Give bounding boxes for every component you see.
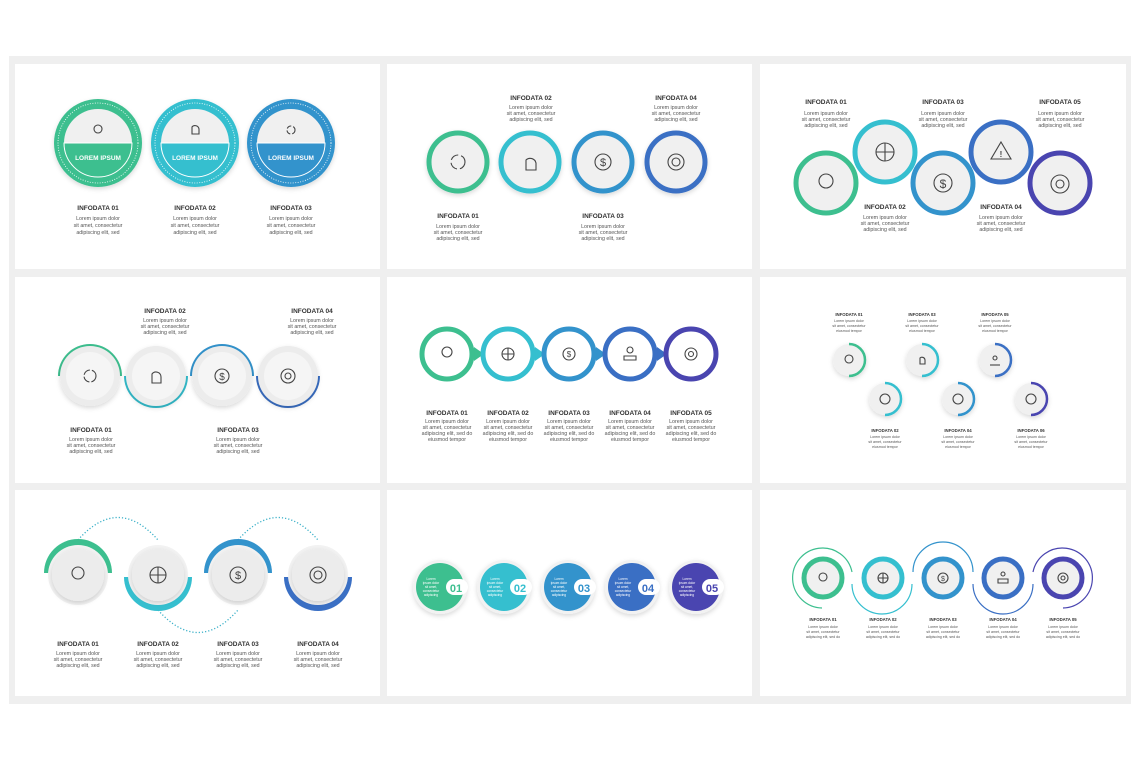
labels: sit amet, consectetur	[866, 630, 900, 634]
icons	[442, 347, 697, 360]
labels: INFODATA 01	[57, 641, 99, 648]
small white texts: sit amet,	[617, 585, 629, 589]
labels: Lorem ipsum dolor	[928, 625, 959, 629]
labels: sit amet, consectetur	[294, 657, 343, 663]
labels: Lorem ipsum dolor	[296, 651, 340, 657]
labels: eiusmod tempor	[982, 329, 1009, 333]
labels: INFODATA 02	[869, 617, 897, 622]
labels: eiusmod tempor	[611, 437, 649, 443]
labels: eiusmod tempor	[428, 437, 466, 443]
labels: sit amet, consectetur	[1036, 117, 1085, 123]
labels: sit amet, consectetur	[288, 324, 337, 330]
labels: INFODATA 01	[77, 205, 119, 212]
labels: adipiscing elit, sed	[436, 236, 480, 242]
icons: $	[940, 177, 947, 191]
labels: INFODATA 02	[174, 205, 216, 212]
labels: INFODATA 03	[908, 312, 936, 317]
labels: adipiscing elit, sed	[296, 663, 340, 669]
labels: INFODATA 04	[291, 308, 333, 315]
icons	[72, 567, 326, 583]
labels: Lorem ipsum dolor	[669, 419, 713, 425]
labels: INFODATA 03	[582, 213, 624, 220]
labels	[806, 617, 1080, 639]
labels: Lorem ipsum dolor	[269, 216, 313, 222]
small white texts: ipsum dolor	[615, 581, 632, 585]
labels: adipiscing elit, sed	[290, 330, 334, 336]
labels: INFODATA 05	[1039, 99, 1081, 106]
labels: eiusmod tempor	[836, 329, 863, 333]
labels	[832, 312, 1048, 449]
labels: sit amet, consectetur	[667, 425, 716, 431]
panel 2: four ring circles	[387, 64, 752, 269]
labels: Lorem ipsum dolor	[56, 651, 100, 657]
labels: sit amet, consectetur	[267, 223, 316, 229]
small white texts: consectetur	[423, 589, 440, 593]
labels: adipiscing elit, sed do	[986, 635, 1020, 639]
labels: adipiscing elit, sed	[216, 663, 260, 669]
labels: Lorem ipsum dolor	[290, 318, 334, 324]
labels: sit amet, consectetur	[941, 440, 975, 444]
labels: sit amet, consectetur	[986, 630, 1020, 634]
labels: adipiscing elit, sed	[804, 123, 848, 129]
small white texts: ipsum dolor	[679, 581, 696, 585]
small white texts	[423, 577, 696, 597]
labels: INFODATA 02	[871, 428, 899, 433]
labels: INFODATA 04	[609, 410, 651, 417]
labels: INFODATA 03	[929, 617, 957, 622]
dotted connectors	[78, 518, 318, 632]
labels: sit amet, consectetur	[214, 657, 263, 663]
labels: sit amet, consectetur	[652, 111, 701, 117]
labels: Lorem ipsum dolor	[834, 319, 865, 323]
icons: $	[600, 157, 606, 169]
labels: INFODATA 01	[426, 410, 468, 417]
labels: Lorem ipsum dolor	[870, 435, 901, 439]
labels: sit amet, consectetur	[802, 117, 851, 123]
labels: eiusmod tempor	[872, 445, 899, 449]
labels	[74, 205, 316, 236]
panel 5: arrow chain five circles	[387, 277, 752, 483]
icons	[819, 142, 1069, 193]
labels: Lorem ipsum dolor	[804, 111, 848, 117]
labels: Lorem ipsum dolor	[863, 215, 907, 221]
small white texts: sit amet,	[681, 585, 693, 589]
panel 9: circles with circular arrows	[760, 490, 1126, 696]
small white texts: Lorem	[682, 577, 692, 581]
labels: sit amet, consectetur	[171, 223, 220, 229]
labels: adipiscing elit, sed	[173, 230, 217, 236]
labels: adipiscing elit, sed do	[605, 431, 655, 437]
labels	[802, 99, 1085, 233]
labels: adipiscing elit, sed	[509, 117, 553, 123]
labels: sit amet, consectetur	[1014, 440, 1048, 444]
labels: sit amet, consectetur	[806, 630, 840, 634]
arrows	[793, 542, 1092, 614]
labels: Lorem ipsum dolor	[69, 437, 113, 443]
labels: Lorem ipsum dolor	[486, 419, 530, 425]
small white texts: ipsum dolor	[423, 581, 440, 585]
labels: Lorem ipsum dolor	[216, 651, 260, 657]
small white texts: adipiscing	[552, 593, 566, 597]
labels: INFODATA 04	[944, 428, 972, 433]
labels: Lorem ipsum dolor	[547, 419, 591, 425]
labels: eiusmod tempor	[909, 329, 936, 333]
labels: adipiscing elit, sed	[654, 117, 698, 123]
labels: adipiscing elit, sed	[216, 449, 260, 455]
panel 8: numbered circles: 02	[514, 583, 526, 595]
labels: sit amet, consectetur	[434, 230, 483, 236]
labels: adipiscing elit, sed	[921, 123, 965, 129]
small white texts: sit amet,	[553, 585, 565, 589]
panel 8: numbered circles: 05	[706, 583, 718, 595]
labels: Lorem ipsum dolor	[654, 105, 698, 111]
labels: INFODATA 01	[805, 99, 847, 106]
labels: sit amet, consectetur	[978, 324, 1012, 328]
panel 8: numbered circles: 04	[642, 583, 655, 595]
labels: INFODATA 02	[137, 641, 179, 648]
labels: sit amet, consectetur	[606, 425, 655, 431]
labels: sit amet, consectetur	[134, 657, 183, 663]
labels: adipiscing elit, sed	[1038, 123, 1082, 129]
labels	[422, 410, 716, 443]
small white texts: Lorem	[490, 577, 500, 581]
circle 1: LOREM IPSUM	[75, 155, 121, 162]
labels: sit amet, consectetur	[54, 657, 103, 663]
labels: Lorem ipsum dolor	[1048, 625, 1079, 629]
labels: Lorem ipsum dolor	[1016, 435, 1047, 439]
labels: adipiscing elit, sed do	[926, 635, 960, 639]
labels: sit amet, consectetur	[1046, 630, 1080, 634]
labels: sit amet, consectetur	[67, 443, 116, 449]
labels: Lorem ipsum dolor	[921, 111, 965, 117]
labels: INFODATA 03	[217, 641, 259, 648]
labels: INFODATA 02	[144, 308, 186, 315]
small white texts: Lorem	[554, 577, 564, 581]
small white texts: ipsum dolor	[487, 581, 504, 585]
labels: sit amet, consectetur	[861, 221, 910, 227]
labels: sit amet, consectetur	[423, 425, 472, 431]
small white texts: Lorem	[618, 577, 628, 581]
labels: adipiscing elit, sed	[581, 236, 625, 242]
labels: INFODATA 06	[1017, 428, 1045, 433]
labels: INFODATA 05	[670, 410, 712, 417]
icons	[819, 572, 1068, 583]
labels: sit amet, consectetur	[484, 425, 533, 431]
labels: INFODATA 04	[989, 617, 1017, 622]
panel 4: chain of four circles	[15, 277, 380, 483]
labels: sit amet, consectetur	[545, 425, 594, 431]
labels: adipiscing elit, sed	[979, 227, 1023, 233]
labels: Lorem ipsum dolor	[979, 215, 1023, 221]
labels: INFODATA 03	[270, 205, 312, 212]
circle 2	[151, 99, 239, 187]
small white texts: adipiscing	[424, 593, 438, 597]
labels: eiusmod tempor	[489, 437, 527, 443]
circle 3	[247, 99, 335, 187]
labels: adipiscing elit, sed do	[422, 431, 472, 437]
labels: adipiscing elit, sed do	[866, 635, 900, 639]
labels: eiusmod tempor	[1018, 445, 1045, 449]
panel 8: numbered circles	[387, 490, 752, 696]
small white texts: adipiscing	[680, 593, 694, 597]
labels: Lorem ipsum dolor	[988, 625, 1019, 629]
labels: adipiscing elit, sed	[136, 663, 180, 669]
small white texts: adipiscing	[488, 593, 502, 597]
labels: INFODATA 01	[70, 427, 112, 434]
circle 2: LOREM IPSUM	[172, 155, 218, 162]
panel 3: zigzag five circles	[760, 64, 1126, 269]
labels: sit amet, consectetur	[832, 324, 866, 328]
labels: sit amet, consectetur	[507, 111, 556, 117]
labels: INFODATA 03	[548, 410, 590, 417]
labels: eiusmod tempor	[672, 437, 710, 443]
labels: Lorem ipsum dolor	[1038, 111, 1082, 117]
labels: eiusmod tempor	[550, 437, 588, 443]
labels: adipiscing elit, sed do	[544, 431, 594, 437]
small white texts: ipsum dolor	[551, 581, 568, 585]
labels: INFODATA 05	[1049, 617, 1077, 622]
labels: INFODATA 02	[864, 204, 906, 211]
labels: Lorem ipsum dolor	[425, 419, 469, 425]
labels: Lorem ipsum dolor	[980, 319, 1011, 323]
labels: Lorem ipsum dolor	[136, 651, 180, 657]
panel 1: three split circles	[15, 64, 380, 269]
small white texts: consectetur	[615, 589, 632, 593]
small white texts: consectetur	[487, 589, 504, 593]
labels	[54, 641, 343, 669]
icons: $	[219, 372, 225, 383]
labels: adipiscing elit, sed	[56, 663, 100, 669]
labels: adipiscing elit, sed	[269, 230, 313, 236]
labels: sit amet, consectetur	[579, 230, 628, 236]
labels: Lorem ipsum dolor	[868, 625, 899, 629]
small white texts: consectetur	[679, 589, 696, 593]
labels: sit amet, consectetur	[214, 443, 263, 449]
labels: adipiscing elit, sed	[76, 230, 120, 236]
labels: adipiscing elit, sed	[863, 227, 907, 233]
labels: INFODATA 03	[217, 427, 259, 434]
labels: adipiscing elit, sed do	[483, 431, 533, 437]
small white texts: adipiscing	[616, 593, 630, 597]
labels: adipiscing elit, sed	[143, 330, 187, 336]
labels: sit amet, consectetur	[977, 221, 1026, 227]
labels: Lorem ipsum dolor	[436, 224, 480, 230]
labels: INFODATA 04	[297, 641, 339, 648]
icons: $	[567, 350, 572, 359]
small white texts: sit amet,	[425, 585, 437, 589]
icons: $	[941, 576, 945, 583]
labels: INFODATA 02	[487, 410, 529, 417]
icons	[451, 154, 684, 170]
labels: Lorem ipsum dolor	[143, 318, 187, 324]
labels: Lorem ipsum dolor	[608, 419, 652, 425]
labels: INFODATA 02	[510, 95, 552, 102]
labels: adipiscing elit, sed do	[666, 431, 716, 437]
labels: sit amet, consectetur	[141, 324, 190, 330]
labels: sit amet, consectetur	[905, 324, 939, 328]
labels: Lorem ipsum dolor	[808, 625, 839, 629]
labels: Lorem ipsum dolor	[173, 216, 217, 222]
labels	[67, 308, 337, 455]
labels: INFODATA 04	[980, 204, 1022, 211]
labels: Lorem ipsum dolor	[943, 435, 974, 439]
icons: !	[1000, 150, 1002, 159]
labels: INFODATA 01	[835, 312, 863, 317]
icons	[84, 369, 295, 383]
labels: Lorem ipsum dolor	[907, 319, 938, 323]
labels: sit amet, consectetur	[926, 630, 960, 634]
labels: sit amet, consectetur	[868, 440, 902, 444]
small white texts: Lorem	[426, 577, 436, 581]
icons: $	[235, 570, 241, 582]
labels: eiusmod tempor	[945, 445, 972, 449]
labels: INFODATA 01	[809, 617, 837, 622]
labels: Lorem ipsum dolor	[509, 105, 553, 111]
labels: adipiscing elit, sed	[69, 449, 113, 455]
small white texts: sit amet,	[489, 585, 501, 589]
small white texts: consectetur	[551, 589, 568, 593]
labels: Lorem ipsum dolor	[76, 216, 120, 222]
icons	[845, 355, 1036, 404]
labels: adipiscing elit, sed do	[806, 635, 840, 639]
labels: Lorem ipsum dolor	[216, 437, 260, 443]
panel 8: numbered circles: 01	[450, 583, 462, 595]
labels: INFODATA 01	[437, 213, 479, 220]
panel 7: circles with dotted connectors	[15, 490, 380, 696]
labels	[434, 95, 701, 242]
labels: sit amet, consectetur	[919, 117, 968, 123]
panel 8: numbered circles: 03	[578, 583, 590, 595]
labels: INFODATA 05	[981, 312, 1009, 317]
labels: sit amet, consectetur	[74, 223, 123, 229]
circle 1	[54, 99, 142, 187]
circle 3: LOREM IPSUM	[268, 155, 314, 162]
labels: adipiscing elit, sed do	[1046, 635, 1080, 639]
labels: Lorem ipsum dolor	[581, 224, 625, 230]
labels: INFODATA 04	[655, 95, 697, 102]
labels: INFODATA 03	[922, 99, 964, 106]
panel 6: six small circles zigzag	[760, 277, 1126, 483]
